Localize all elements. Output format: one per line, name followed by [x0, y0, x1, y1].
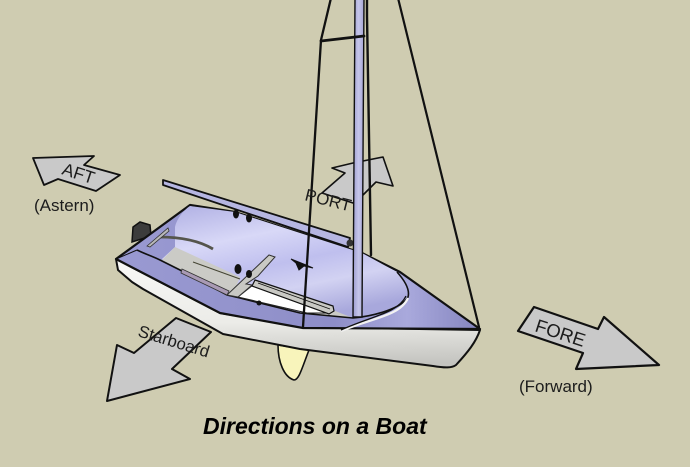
thwart: [227, 255, 275, 297]
side bench: [181, 269, 229, 295]
label: FORE: FORE: [533, 315, 588, 351]
stern corner strokes: [116, 250, 137, 259]
deck: [116, 205, 480, 329]
label: AFT: AFT: [60, 159, 98, 188]
label: (Astern): (Astern): [34, 196, 94, 215]
centerboard case: [252, 280, 334, 314]
keel: [278, 345, 309, 380]
mast: [353, 0, 364, 317]
label: PORT: PORT: [303, 185, 353, 215]
rigging: [303, 0, 479, 327]
tiller: [159, 237, 213, 249]
outboard motor: [132, 222, 151, 242]
coaming: [137, 250, 409, 318]
label: (Forward): (Forward): [519, 377, 593, 396]
boom: [163, 180, 350, 247]
label: Starboard: Starboard: [136, 322, 212, 361]
arrow: aft: [33, 156, 120, 191]
arrow: starboard: [107, 318, 211, 401]
white cabin opening: [238, 285, 327, 313]
fittings: [234, 264, 242, 274]
cockpit interior: [162, 206, 409, 318]
arrow: fore: [518, 307, 659, 369]
boat: [116, 180, 480, 367]
hull side: [116, 259, 480, 367]
title: Directions on a Boat: [203, 413, 428, 439]
arrow: port: [322, 157, 393, 203]
cockpit sole: [162, 247, 240, 297]
